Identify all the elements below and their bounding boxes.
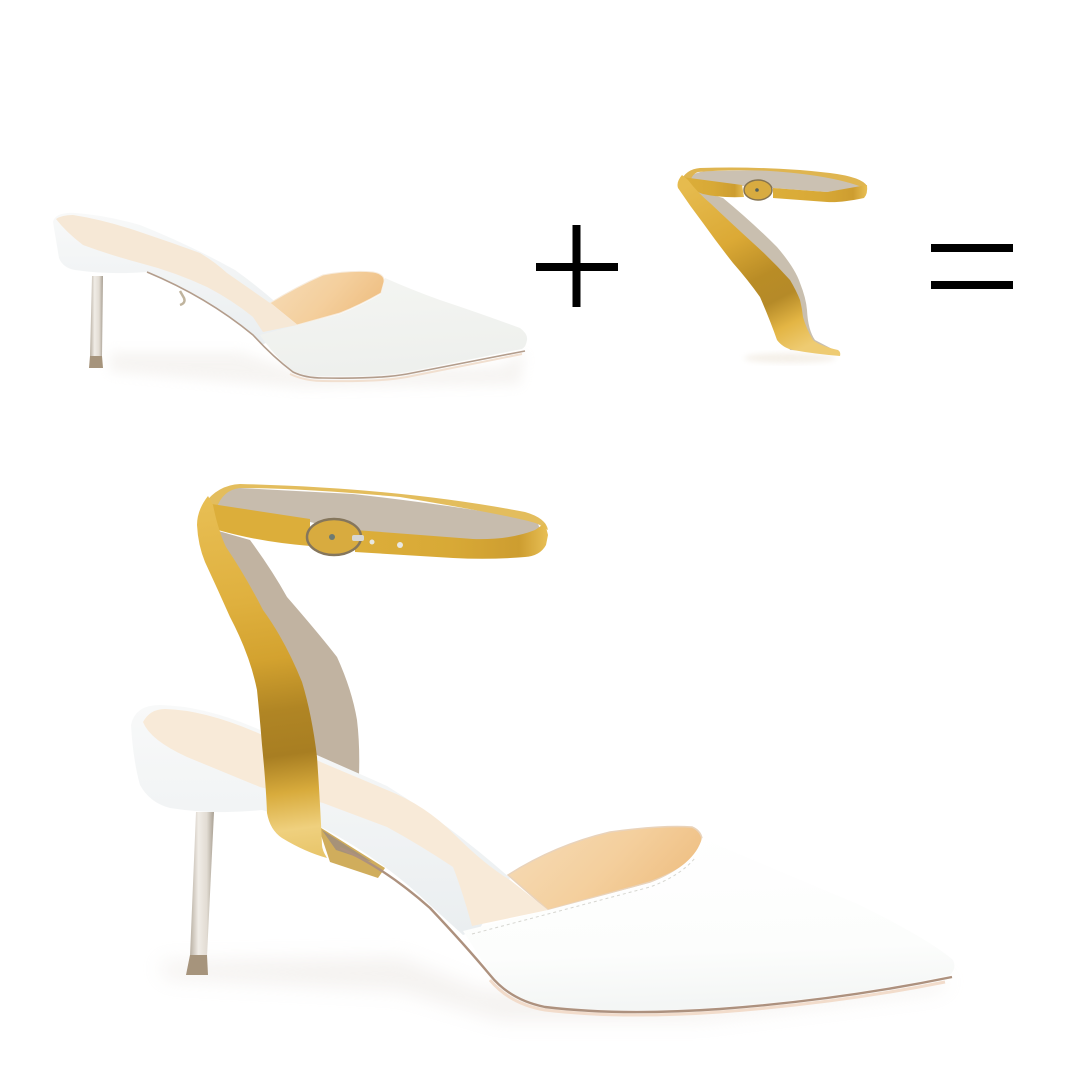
strap upper rim (680, 168, 867, 187)
mule vamp (260, 278, 527, 376)
large sole edge (340, 848, 952, 1012)
mule stiletto heel (89, 276, 103, 368)
mule side wall and heel cup (53, 213, 300, 345)
large insole opening (508, 827, 702, 910)
mule ornament (180, 291, 184, 305)
large stiletto heel (186, 812, 214, 975)
strap band left of buckle (682, 177, 744, 197)
small white mule shoe (53, 213, 527, 388)
mule sole edge (147, 272, 525, 378)
large shoe floor shadow (160, 958, 950, 1020)
small gold ankle strap (678, 168, 867, 363)
large strap vertical section (197, 496, 327, 858)
large sole underside (490, 980, 945, 1015)
equals sign (931, 244, 1013, 289)
large side wall and heel cup (131, 705, 510, 935)
large strap band left of buckle (205, 503, 310, 546)
large footbed (143, 709, 548, 926)
large strap band right of buckle (355, 523, 548, 559)
strap shadow (744, 353, 836, 363)
large strap buckle (307, 519, 364, 555)
large back strap lining (215, 530, 359, 775)
strap band right of buckle (773, 185, 867, 202)
large vamp stitching (472, 858, 695, 934)
mule sole underside (290, 354, 522, 381)
large vamp (463, 838, 954, 1010)
plus sign (536, 225, 618, 307)
strap buckle (744, 180, 772, 200)
strap buckle pin (755, 188, 759, 192)
large ornament tab (318, 826, 385, 878)
mule floor shadow (110, 352, 525, 388)
large strap upper rim (204, 484, 548, 530)
mule insole opening (270, 271, 384, 325)
strap back lining (695, 190, 838, 352)
large strap top lining (212, 488, 540, 542)
strap top lining (688, 170, 861, 192)
mule footbed (56, 215, 297, 332)
strap vertical section (678, 175, 840, 356)
large combined slingback shoe (131, 484, 954, 1020)
large strap holes (370, 540, 403, 548)
